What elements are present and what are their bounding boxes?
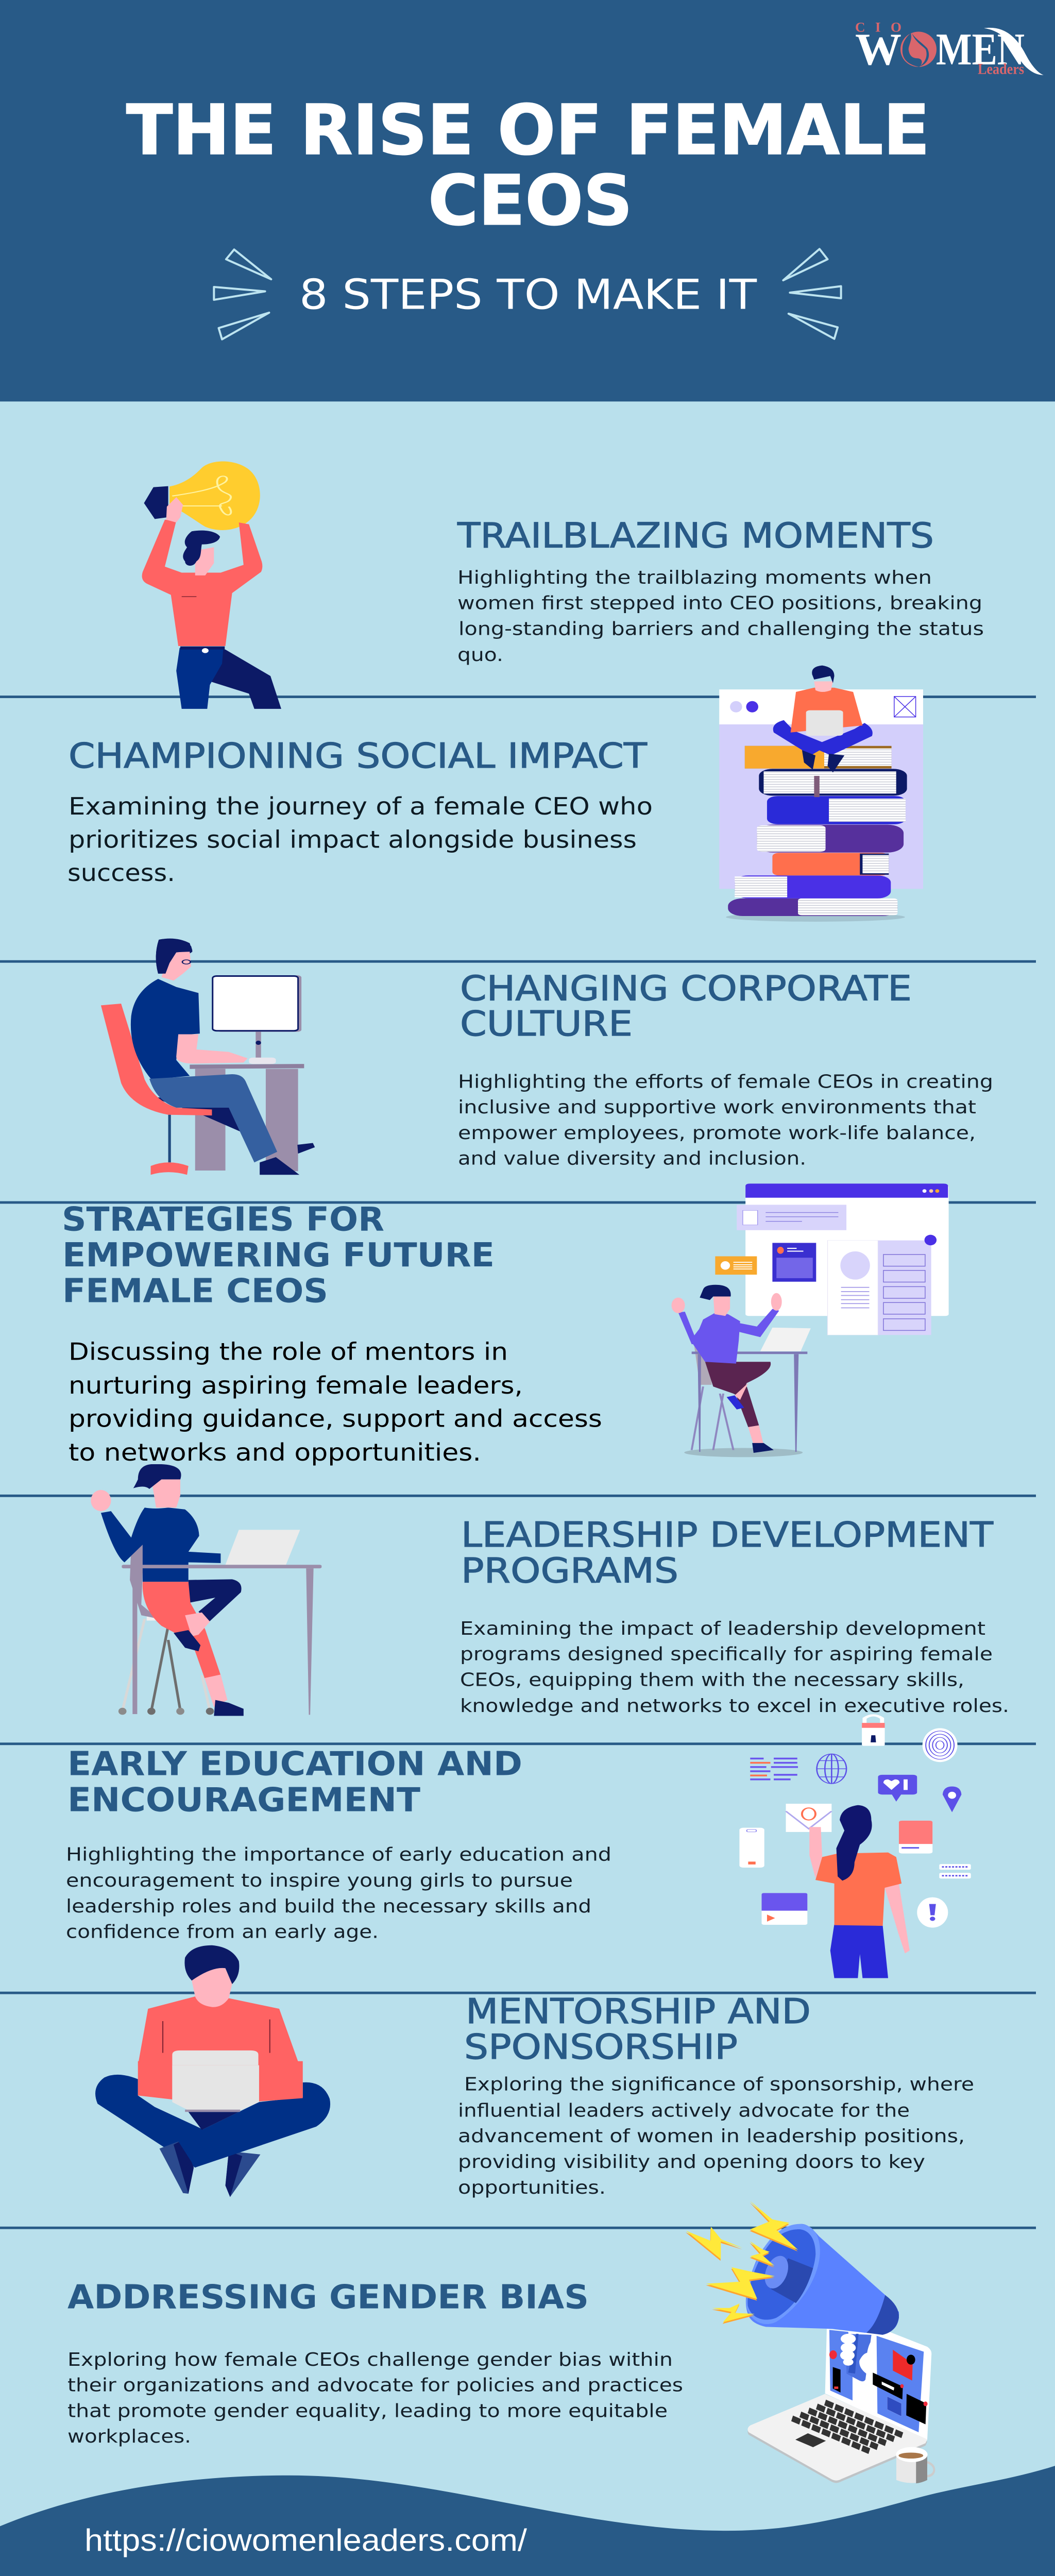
heading	[464, 1991, 811, 2067]
body text	[69, 1338, 602, 1466]
icon: video player	[762, 1893, 807, 1925]
illustration: person sitting cross-legged with laptop	[95, 1945, 330, 2197]
body text: Exploring the significance of sponsorship, where	[464, 2074, 974, 2095]
body text	[457, 567, 984, 666]
footer url: https://ciowomenleaders.com/	[84, 2523, 528, 2557]
body text: that promote gender equality, leading to more equitable	[67, 2401, 668, 2421]
logo: CIO Women Leaders: CIO	[855, 20, 901, 35]
body text: quo.	[457, 645, 503, 666]
logo: CIO Women Leaders	[855, 20, 1044, 77]
body text: success.	[67, 859, 175, 887]
heading: SPONSORSHIP	[464, 2027, 738, 2067]
lightning bolts	[686, 2201, 798, 2324]
body text	[458, 2074, 974, 2198]
heading: FEMALE CEOS	[62, 1272, 328, 1310]
body text: knowledge and networks to excel in executive roles.	[460, 1696, 1009, 1717]
body text: CEOs, equipping them with the necessary skills,	[460, 1670, 964, 1690]
illustration: person sitting on stack of books	[719, 666, 923, 922]
heading	[461, 1515, 994, 1590]
heading: PROGRAMS	[461, 1551, 678, 1590]
body text: Examining the impact of leadership development	[460, 1618, 985, 1639]
icon: code lines	[750, 1758, 798, 1780]
heading	[67, 1744, 522, 1819]
header band	[0, 0, 1055, 401]
body text: opportunities.	[458, 2177, 606, 2198]
body text: influential leaders actively advocate for the	[458, 2100, 910, 2121]
body text: Highlighting the importance of early education and	[66, 1844, 611, 1865]
icon: globe	[817, 1754, 846, 1784]
footer wave	[0, 2466, 1055, 2576]
heading: CHAMPIONING SOCIAL IMPACT	[69, 736, 648, 776]
icon: location pin	[943, 1786, 961, 1812]
section 2: championing social impact	[67, 736, 653, 887]
logo: CIO Women Leaders: W	[855, 25, 901, 75]
icon: alert	[917, 1897, 948, 1927]
illustration: man working at a computer	[101, 939, 315, 1175]
body text: their organizations and advocate for policies and practices	[67, 2375, 683, 2396]
section 3: changing corporate culture	[458, 969, 993, 1170]
body text: encouragement to inspire young girls to pursue	[66, 1870, 573, 1891]
body text: and value diversity and inclusion.	[458, 1148, 806, 1170]
woman figure	[809, 1805, 910, 1978]
icon: fingerprint	[923, 1728, 958, 1762]
body text: providing guidance, support and access	[69, 1405, 602, 1432]
body text: programs designed specifically for aspiring female	[460, 1644, 993, 1665]
body text: workplaces.	[67, 2427, 191, 2447]
body text: Highlighting the efforts of female CEOs in creating	[458, 1072, 993, 1092]
heading: CHANGING CORPORATE	[460, 969, 912, 1008]
laptop	[747, 2329, 931, 2483]
body text: advancement of women in leadership positions,	[458, 2126, 965, 2147]
body text: to networks and opportunities.	[69, 1438, 481, 1466]
illustration: person lifting light bulb	[142, 462, 281, 709]
body text: women first stepped into CEO positions, breaking	[457, 593, 982, 614]
body text: nurturing aspiring female leaders,	[69, 1372, 523, 1399]
body text: long-standing barriers and challenging the status	[458, 619, 984, 639]
section 1: trailblazing moments	[457, 516, 984, 666]
heading: TRAILBLAZING MOMENTS	[457, 516, 934, 555]
body text	[66, 1844, 611, 1943]
section 8: addressing gender bias	[67, 2278, 683, 2447]
heading	[460, 969, 912, 1044]
heading: MENTORSHIP AND	[466, 1991, 811, 2031]
body text	[460, 1618, 1009, 1717]
heading: ADDRESSING GENDER BIAS	[67, 2278, 589, 2316]
icon: phone	[739, 1828, 764, 1868]
body text	[67, 2349, 683, 2447]
body text: leadership roles and build the necessary skills and	[66, 1896, 591, 1917]
heading: ENCOURAGEMENT	[67, 1781, 421, 1819]
body text: Highlighting the trailblazing moments when	[457, 567, 932, 588]
icon: card	[899, 1821, 932, 1854]
body text: prioritizes social impact alongside business	[69, 826, 637, 853]
subtitle: 8 STEPS TO MAKE IT	[299, 271, 757, 319]
heading: LEADERSHIP DEVELOPMENT	[461, 1515, 994, 1555]
illustration: woman presenting web interface	[671, 1183, 949, 1457]
icon: password fields	[939, 1864, 971, 1878]
illustration: megaphone over laptop with coffee mug	[686, 2201, 934, 2483]
logo: CIO Women Leaders: MEN	[936, 25, 1025, 75]
heading: EARLY EDUCATION AND	[67, 1744, 522, 1783]
body text: Exploring how female CEOs challenge gender bias within	[67, 2349, 673, 2370]
section 7: mentorship and sponsorship	[458, 1991, 974, 2198]
heading: STRATEGIES FOR	[62, 1200, 384, 1239]
title	[126, 90, 930, 241]
body text: Examining the journey of a female CEO who	[69, 793, 653, 820]
body text: Discussing the role of mentors in	[69, 1338, 508, 1366]
burst accents around subtitle	[214, 249, 841, 340]
section 6: early education and encouragement	[66, 1744, 611, 1943]
logo: CIO Women Leaders: Leaders	[978, 61, 1024, 77]
heading: CULTURE	[460, 1004, 633, 1044]
title: THE RISE OF FEMALE	[126, 90, 930, 170]
body text	[67, 793, 653, 887]
megaphone	[746, 2224, 899, 2335]
body text: empower employees, promote work-life balance,	[458, 1123, 976, 1144]
section 4: strategies for empowering future female CEOs	[62, 1200, 602, 1466]
heading	[62, 1200, 495, 1310]
body text: confidence from an early age.	[66, 1922, 379, 1943]
heading: EMPOWERING FUTURE	[62, 1236, 495, 1275]
body text: inclusive and supportive work environments that	[458, 1097, 976, 1118]
icon: like bubble	[878, 1775, 917, 1802]
icon: email envelope	[786, 1804, 831, 1832]
icon: padlock	[862, 1715, 885, 1746]
body text	[458, 1072, 993, 1170]
illustration: woman on stool with laptop	[91, 1464, 321, 1716]
coffee mug	[896, 2447, 934, 2483]
title: CEOS	[428, 160, 633, 241]
illustration: woman surrounded by digital icons	[739, 1715, 971, 1978]
section 5: leadership development programs	[460, 1515, 1009, 1717]
body text: providing visibility and opening doors to key	[458, 2151, 925, 2173]
